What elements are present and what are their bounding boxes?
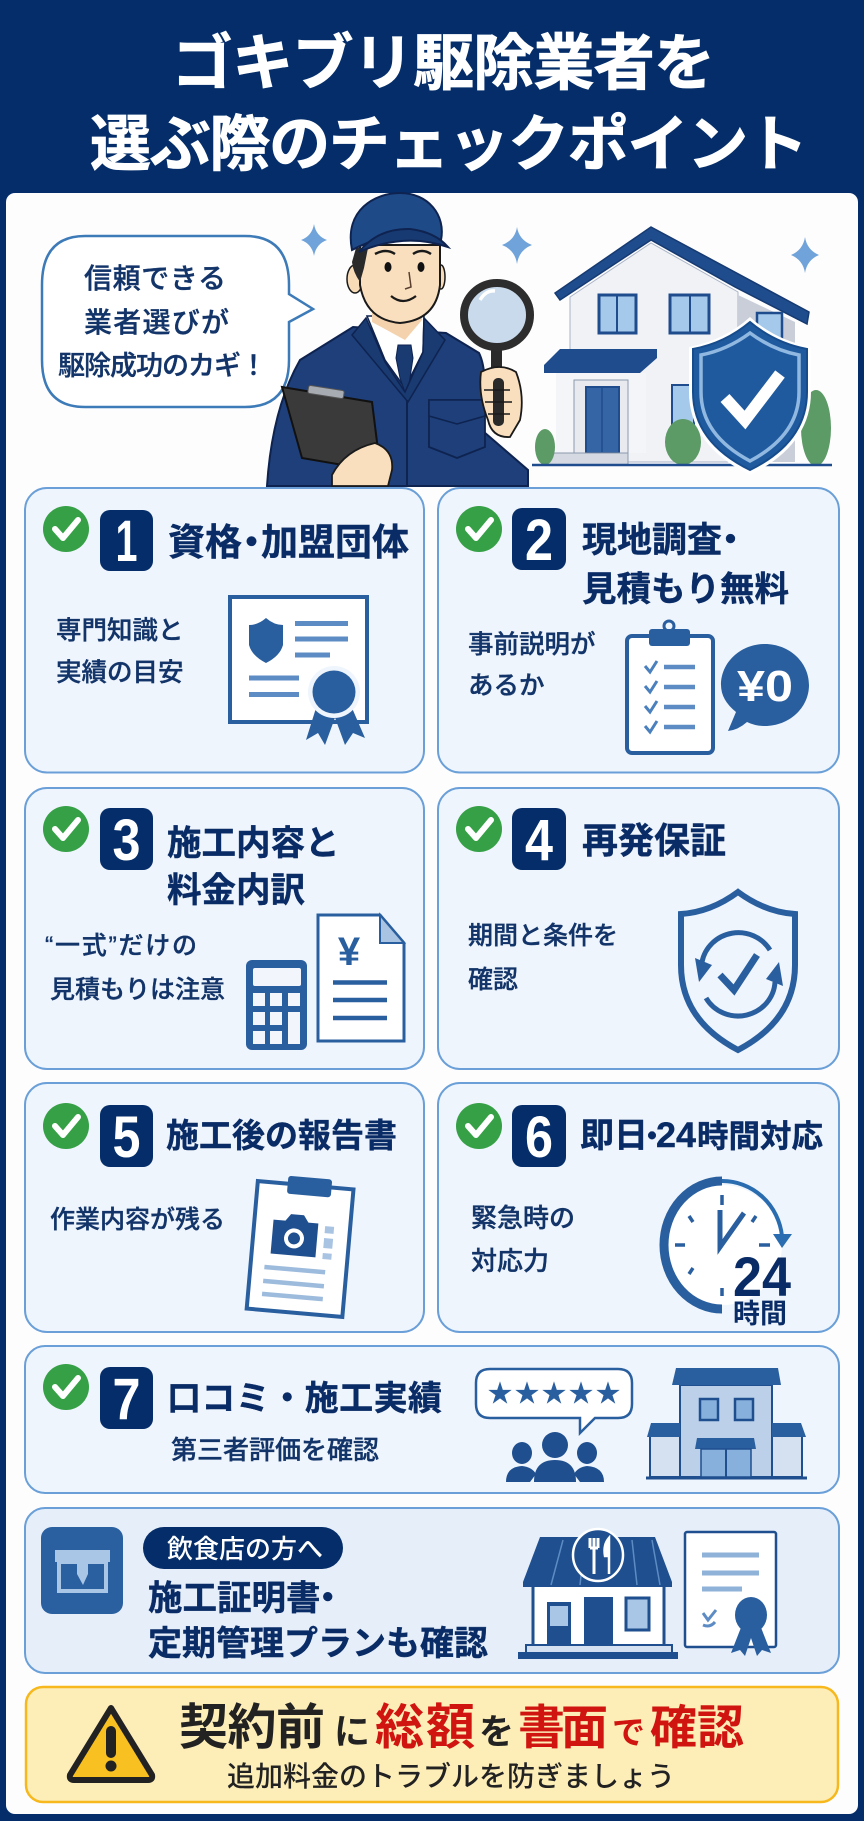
card 2: [438, 488, 839, 772]
number badge 5: [100, 1105, 153, 1170]
number badge 7: 7: [112, 1367, 140, 1432]
text 8: [148, 1580, 488, 1663]
left hand: [332, 443, 392, 486]
icon: invoice: [318, 915, 404, 1041]
icon: clipboard: [627, 621, 713, 753]
body: [267, 327, 528, 486]
icon: clock 24h: 24: [733, 1245, 791, 1308]
heading 3: 施工内容と: [167, 825, 340, 863]
speech bubble: 業者選びが: [84, 307, 229, 338]
icon: review bubble: ★: [595, 1380, 621, 1408]
text 2: 事前説明が: [468, 631, 596, 659]
icon: clock 24h: 時間: [733, 1299, 787, 1329]
warning subtext: 追加料金のトラブルを防ぎましょう: [227, 1761, 675, 1792]
number badge 6: 6: [525, 1105, 553, 1170]
icon: review bubble: [476, 1369, 632, 1433]
number badge 6: [512, 1105, 566, 1170]
icon: shield with check: [689, 317, 811, 475]
heading 2: [582, 521, 789, 609]
card 4: [438, 788, 839, 1069]
warning headline: 契約前: [179, 1701, 325, 1755]
number badge 1: [100, 509, 153, 574]
clipboard: [282, 387, 378, 470]
illustration: inspector: [267, 193, 530, 486]
card 8: restaurant: [25, 1508, 839, 1673]
heading 7: 口コミ・施工実績: [167, 1380, 442, 1418]
heading 6: [580, 1116, 823, 1155]
icon: sparkles: [301, 224, 819, 273]
icon: review bubble: ★: [568, 1380, 594, 1408]
text 7: 第三者評価を確認: [171, 1435, 379, 1465]
icon: certificate: [230, 597, 367, 745]
card 3: [25, 788, 424, 1069]
illustration: house: [532, 227, 832, 466]
icon: box: [41, 1527, 123, 1614]
icon: review bubble: ★: [514, 1380, 540, 1408]
warning headline: に: [334, 1711, 370, 1752]
title: [90, 29, 808, 178]
text 3: “一式”だけの: [45, 932, 197, 960]
number badge 4: 4: [525, 808, 553, 873]
text 4: [468, 922, 618, 994]
text 4: 期間と条件を: [468, 922, 618, 950]
text 1: [56, 617, 184, 687]
neck and face: [372, 300, 422, 340]
card 6: [438, 1083, 839, 1332]
icon: restaurant: [518, 1529, 678, 1659]
card 1: [25, 488, 424, 772]
number badge 7: [100, 1367, 153, 1432]
cap: [351, 193, 442, 250]
speech bubble: 信頼できる: [84, 263, 226, 294]
warning headline: 総額: [375, 1701, 475, 1755]
heading 6: ・: [637, 1121, 667, 1154]
warning headline: 書面: [518, 1701, 608, 1754]
number badge 5: 5: [112, 1105, 140, 1170]
number badge 3: [100, 808, 153, 873]
warning headline: [179, 1701, 744, 1755]
pill label: [143, 1527, 343, 1569]
title: ゴキブリ駆除業者を: [172, 29, 715, 97]
text 1: 専門知識と: [56, 617, 184, 645]
card 5: [25, 1083, 424, 1332]
icon: clock 24h: [662, 1181, 792, 1329]
text 8: 施工証明書・: [148, 1580, 345, 1618]
right hand with magnifier: [491, 345, 502, 380]
heading 3: [167, 825, 340, 910]
number badge 2: 2: [525, 508, 553, 573]
icon: zero yen bubble: ¥0: [737, 662, 793, 711]
text 3: 見積もりは注意: [50, 976, 225, 1004]
heading 5: 施工後の報告書: [166, 1117, 397, 1154]
speech bubble: 駆除成功のカギ！: [58, 351, 267, 381]
number badge 1: 1: [116, 509, 138, 574]
heading 1: 資格・加盟団体: [168, 522, 409, 563]
icon: review bubble: ★: [487, 1380, 513, 1408]
icon: invoice: ¥: [338, 930, 361, 974]
icon: people: [506, 1432, 604, 1482]
warning headline: を: [479, 1713, 514, 1752]
speech bubble: [42, 236, 313, 407]
heading 6: 時間対応: [697, 1118, 823, 1154]
icon: review bubble: ★: [541, 1380, 567, 1408]
text 2: あるか: [468, 672, 545, 700]
heading 6: 即日: [580, 1117, 648, 1155]
icon: certificate document: [685, 1532, 776, 1656]
warning headline: で: [612, 1714, 645, 1751]
text 3: [45, 932, 225, 1004]
text 8: 定期管理プランも確認: [148, 1625, 488, 1663]
number badge 2: [512, 508, 566, 573]
text 4: 確認: [468, 966, 518, 994]
icon: guarantee shield: [681, 892, 795, 1050]
number badge 3: 3: [112, 808, 140, 873]
icon: zero yen bubble: [721, 644, 809, 731]
text 5: 作業内容が残る: [50, 1206, 225, 1234]
text 6: [471, 1203, 575, 1276]
icon: report clipboard: [247, 1173, 354, 1317]
icon: warning triangle: [70, 1708, 152, 1780]
pill label: 飲食店の方へ: [167, 1534, 323, 1564]
heading 4: 再発保証: [582, 820, 726, 861]
card 7: [25, 1346, 839, 1493]
warning banner: [26, 1687, 838, 1802]
text 6: 対応力: [471, 1246, 549, 1276]
warning headline: 確認: [650, 1701, 744, 1754]
heading 2: 見積もり無料: [582, 571, 789, 609]
icon: company building: [646, 1368, 807, 1478]
heading 3: 料金内訳: [167, 872, 305, 910]
title: 選ぶ際のチェックポイント: [90, 110, 808, 178]
heading 6: 24: [656, 1116, 697, 1155]
number badge 4: [512, 808, 566, 873]
heading 2: 現地調査・: [582, 521, 748, 560]
text 6: 緊急時の: [471, 1203, 575, 1233]
text 2: [468, 631, 596, 700]
text 1: 実績の目安: [56, 659, 184, 687]
icon: calculator: [246, 960, 307, 1050]
